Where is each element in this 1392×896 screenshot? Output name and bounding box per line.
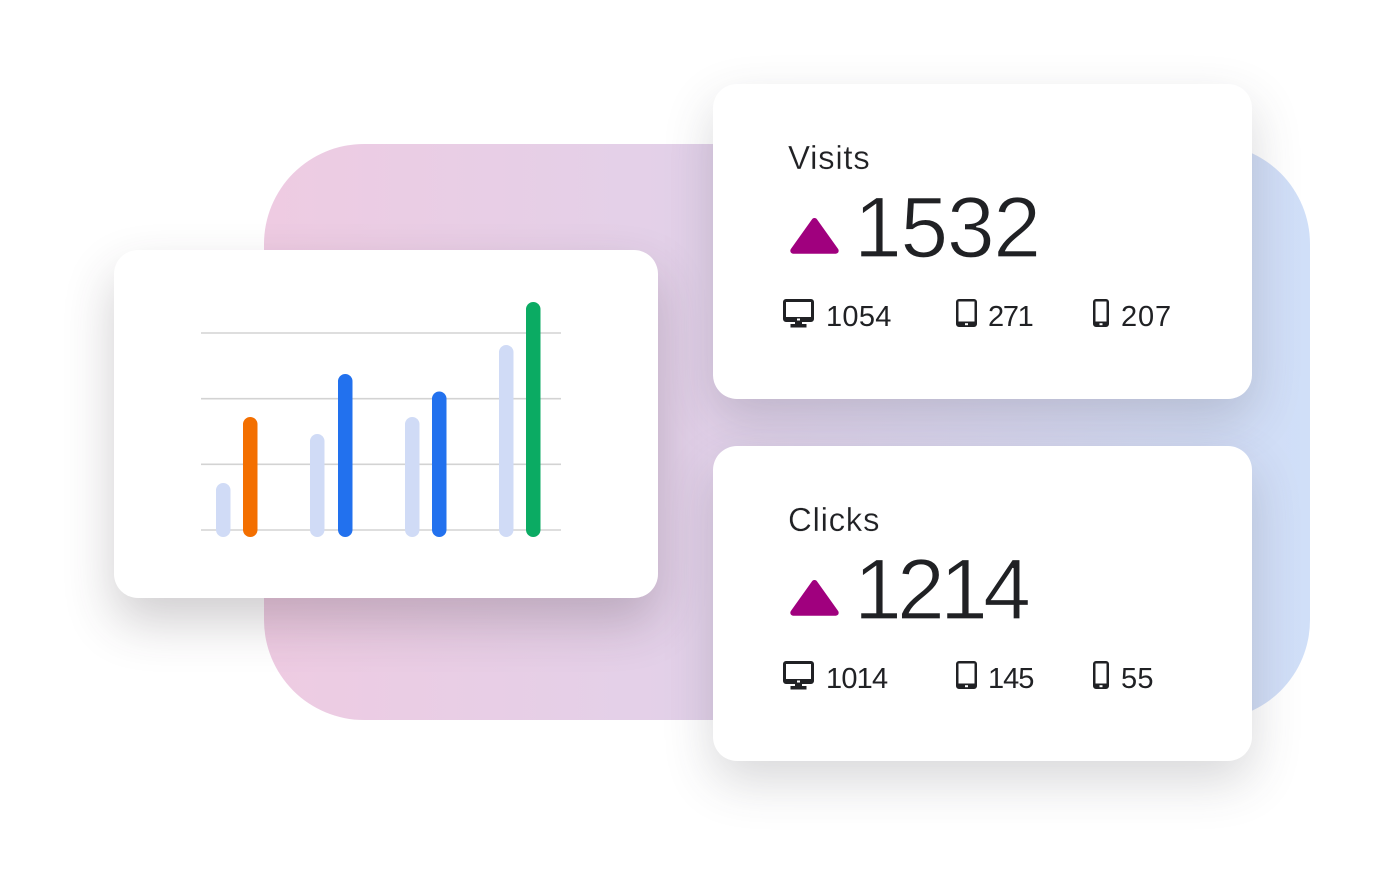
heading: clicks: Clicks [788, 501, 880, 538]
icon: up triangle [790, 580, 839, 616]
stat: visits tablet: 271 [988, 301, 1032, 333]
icon: up triangle [790, 218, 839, 254]
stat: clicks tablet: 145 [988, 663, 1033, 695]
icon: phone [1093, 299, 1109, 327]
metric: visits total: 1532 [854, 180, 1040, 276]
panel: bar chart card [114, 250, 658, 598]
stat: visits phone: 207 [1121, 301, 1172, 333]
stat: visits desktop: 1054 [826, 301, 892, 333]
icon: tablet [956, 299, 977, 327]
panel: visits card [713, 84, 1252, 399]
panel: clicks card [713, 446, 1252, 761]
bar chart [201, 302, 561, 537]
stat: clicks phone: 55 [1121, 663, 1154, 695]
heading: visits: Visits [788, 139, 870, 176]
stat: clicks desktop: 1014 [826, 663, 887, 695]
metric: clicks total: 1214 [854, 542, 1026, 638]
icon: desktop [783, 299, 814, 328]
icon: desktop [783, 661, 814, 690]
background gradient panel [264, 144, 1310, 720]
icon: tablet [956, 661, 977, 689]
icon: phone [1093, 661, 1109, 689]
